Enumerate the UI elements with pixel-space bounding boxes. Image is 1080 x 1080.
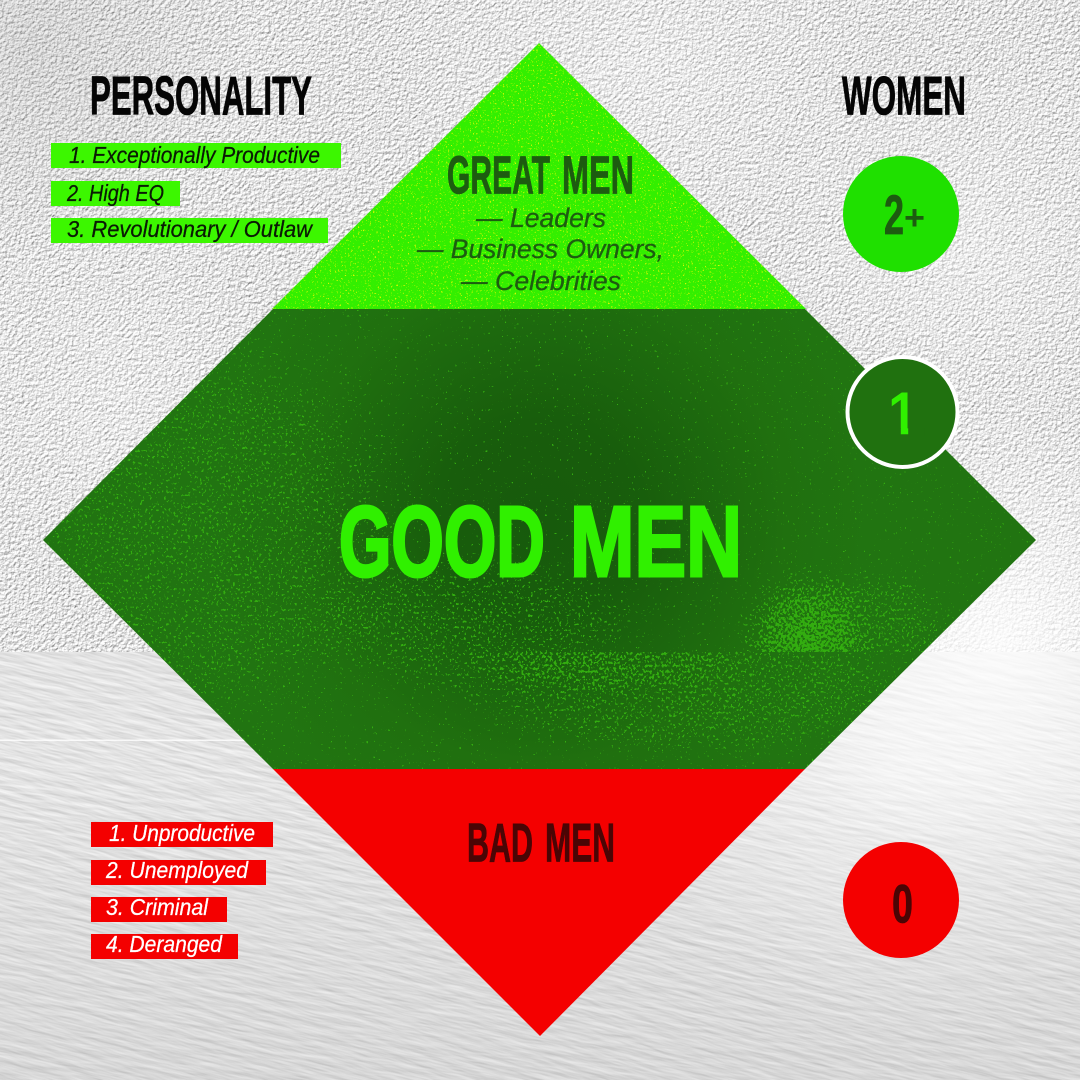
- trait 4: 4. Deranged: [106, 931, 223, 957]
- heading: bad men: MEN: [545, 813, 615, 874]
- trait 3: 3. Revolutionary / Outlaw: [67, 216, 313, 242]
- segment: bad men: [273, 769, 805, 1036]
- examples: great men: — Leaders: [475, 203, 606, 233]
- trait 1: 1. Unproductive: [109, 820, 255, 846]
- heading: great men: MEN: [562, 146, 634, 206]
- heading: women: WOMEN: [842, 66, 966, 127]
- heading: bad men: BAD: [467, 813, 533, 874]
- segment: good men: [0, 309, 1040, 770]
- examples: great men: [416, 203, 664, 296]
- badge: bad men 0 women: [843, 842, 959, 958]
- trait 2: 2. Unemployed: [105, 857, 249, 883]
- segment: great men: [270, 40, 810, 310]
- badge: great men 2+ women: [843, 156, 959, 272]
- list: negative personality traits: [91, 820, 273, 959]
- badge: great men 2+ women: 2: [884, 183, 904, 246]
- heading: good men: GOOD: [339, 486, 545, 598]
- examples: great men: — Celebrities: [460, 266, 621, 296]
- badge: good men 1 woman: [848, 357, 958, 467]
- heading: great men: GREAT: [447, 146, 550, 206]
- trait 2: 2. High EQ: [66, 180, 164, 206]
- badge: great men 2+ women: +: [904, 199, 925, 237]
- examples: great men: — Business Owners,: [416, 234, 664, 264]
- badge: good men 1 woman: 1: [887, 382, 919, 446]
- block: great men label: [416, 146, 664, 296]
- heading: personality: PERSONALITY: [90, 66, 312, 127]
- list: positive personality traits: [51, 142, 341, 243]
- trait 1: 1. Exceptionally Productive: [69, 142, 320, 168]
- heading: good men: MEN: [570, 486, 742, 598]
- badge: bad men 0 women: 0: [892, 874, 913, 934]
- trait 3: 3. Criminal: [106, 894, 209, 920]
